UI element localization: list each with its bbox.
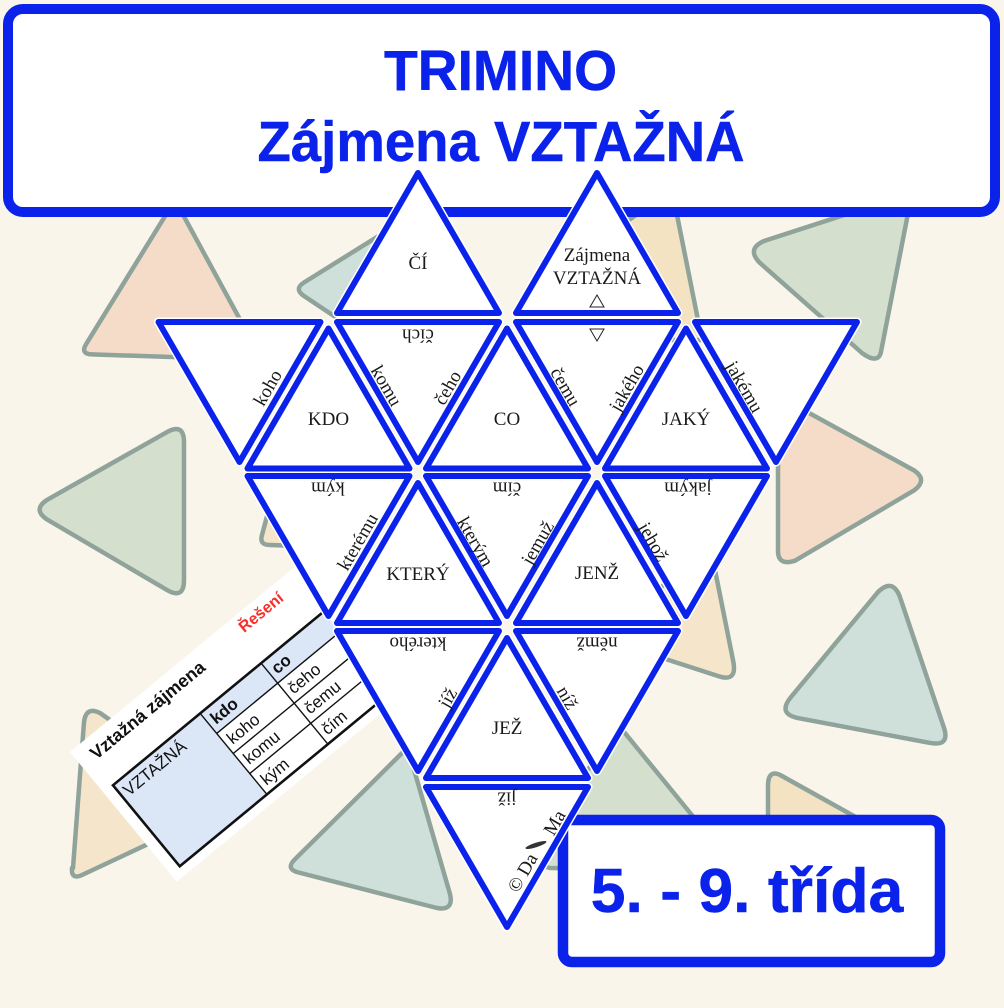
tile: čích komu čeho	[337, 322, 499, 462]
tile: čím kterým jemuž	[426, 476, 588, 616]
tile: CO	[426, 328, 588, 468]
tile: čím kterým jemuž: kterým	[452, 514, 497, 571]
tile: Zájmena VZTAŽNÁ	[516, 173, 678, 313]
tile: kým kterému	[248, 476, 410, 616]
tile: jakému: jakému	[720, 357, 767, 417]
solution table: kdo	[207, 694, 242, 728]
solution heading: Vztažná zájmena	[86, 656, 210, 763]
title line 2: Zájmena VZTAŽNÁ	[258, 109, 744, 174]
tile: němž níž: němž	[576, 632, 618, 653]
grade text: 5. - 9. třída	[591, 856, 905, 926]
tile: kterého jíž: jíž	[434, 685, 462, 712]
tile: JAKÝ: JAKÝ	[662, 408, 711, 430]
solution table: co	[268, 650, 295, 678]
tile: jakým jehož	[605, 476, 767, 616]
tile: JEŽ	[426, 638, 588, 778]
decorative background triangles	[40, 190, 945, 908]
grade badge	[563, 820, 940, 962]
title line 1: TRIMINO	[384, 39, 617, 103]
tile: jakým jehož: jakým	[664, 477, 713, 498]
tile: JENŽ: JENŽ	[575, 562, 619, 584]
tile: Zájmena VZTAŽNÁ: Zájmena	[564, 245, 631, 266]
tile: němž níž	[516, 631, 678, 771]
tile: koho: koho	[250, 366, 287, 410]
tile: ČÍ: ČÍ	[408, 252, 428, 274]
tile: čích komu čeho: komu	[366, 362, 406, 411]
tile: KDO	[248, 328, 410, 468]
solution table	[113, 602, 402, 866]
tile: ČÍ	[337, 173, 499, 313]
tile: již and author mark: již	[498, 787, 518, 808]
tile: již and author mark: © Da	[504, 849, 543, 896]
tile: JEŽ: JEŽ	[492, 717, 522, 739]
tile: již and author mark	[426, 787, 588, 927]
tile: kým kterému: kterému	[334, 509, 383, 574]
tile: kým kterému: kým	[311, 477, 345, 498]
tile: čemu jakého: jakého	[605, 361, 649, 416]
tile: již and author mark: Ma	[540, 806, 571, 839]
tile: CO: CO	[494, 409, 520, 430]
tile: němž níž: níž	[552, 683, 582, 713]
solution table: čeho	[284, 660, 325, 698]
tile: JENŽ	[516, 483, 678, 623]
tile: čích komu čeho: čeho	[430, 367, 466, 409]
tile: jakému	[695, 322, 857, 462]
tile: Zájmena VZTAŽNÁ: VZTAŽNÁ	[553, 267, 641, 289]
solution card	[70, 555, 416, 882]
solution table: čemu	[301, 677, 345, 718]
tile: JAKÝ	[605, 328, 767, 468]
solution table: koho	[223, 710, 264, 748]
tile: KDO: KDO	[308, 409, 349, 430]
tile: čemu jakého: čemu	[545, 364, 584, 411]
tile: kterého jíž: kterého	[390, 632, 446, 653]
solution table: čím	[318, 707, 351, 739]
solution table: komu	[240, 727, 284, 768]
tile: jakým jehož: jehož	[633, 518, 672, 565]
solution table: VZTAŽNÁ	[119, 736, 191, 800]
tile white backing	[158, 173, 857, 927]
solution label: Řešení	[235, 588, 288, 636]
header panel	[8, 9, 995, 212]
tile: KTERÝ	[337, 483, 499, 623]
solution table: kým	[257, 754, 293, 789]
tile: čích komu čeho: čích	[402, 324, 434, 345]
tile: čím kterým jemuž: jemuž	[517, 518, 559, 569]
tile: kterého jíž	[337, 631, 499, 771]
tile: čím kterým jemuž: čím	[493, 477, 521, 498]
tile: KTERÝ: KTERÝ	[386, 563, 450, 585]
tile: koho	[158, 322, 320, 462]
tile: čemu jakého	[516, 322, 678, 462]
